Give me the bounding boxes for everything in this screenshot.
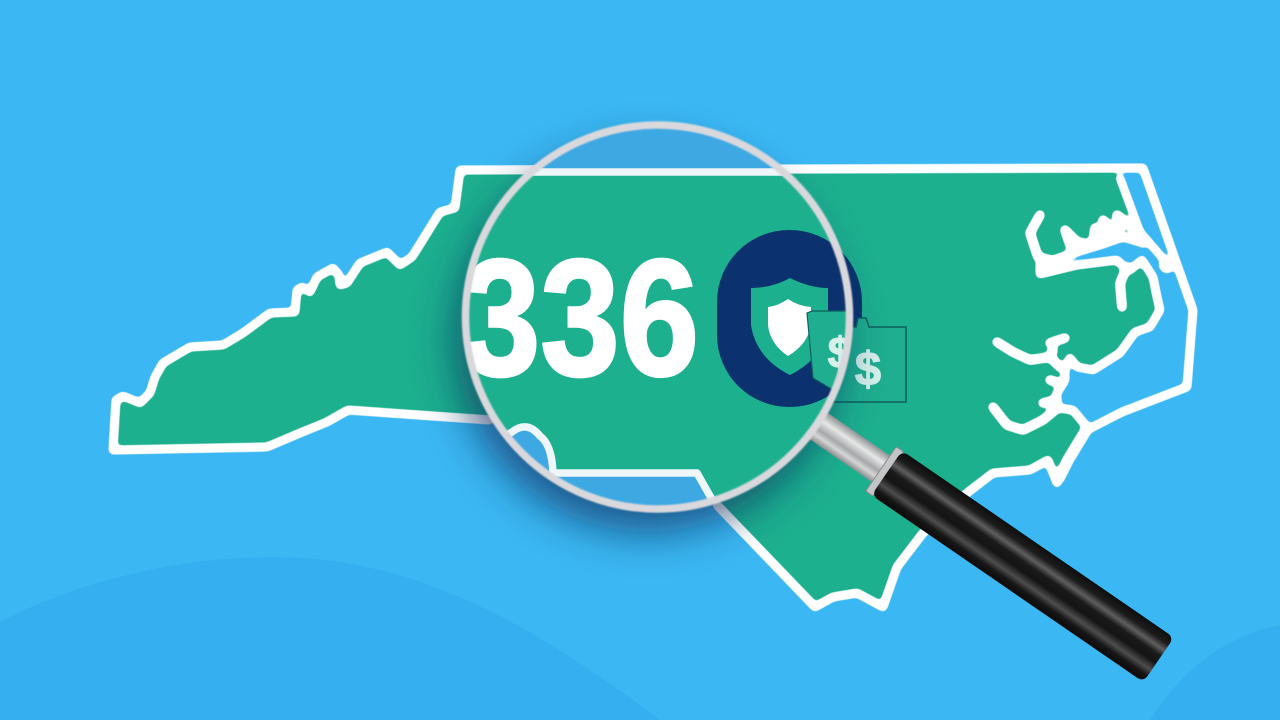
state outline and creeks — [113, 168, 1193, 607]
logo tail outside lens — [717, 230, 862, 407]
background wave: right — [1150, 625, 1280, 720]
lens map — [468, 168, 832, 500]
card: dollar bill outside lens: $ — [855, 342, 881, 395]
icon: navy rounded badge — [717, 230, 846, 407]
map: North Carolina state — [113, 168, 1193, 607]
magnifying glass ring — [466, 125, 850, 509]
icon: shield inner — [768, 299, 811, 356]
black grip — [871, 451, 1174, 682]
state fill — [113, 170, 1160, 607]
icon: shield — [751, 278, 828, 375]
metal neck — [806, 410, 897, 487]
lens shadow — [456, 148, 840, 532]
icon: dollar card in lens — [806, 310, 847, 390]
magnifying glass handle — [800, 401, 1174, 682]
collar — [866, 447, 904, 496]
background wave: left — [0, 557, 660, 720]
lens area code number: 336 — [461, 226, 699, 411]
magnified lens content — [468, 130, 847, 506]
card: dollar bill outside lens — [830, 318, 906, 402]
icon: dollar card in lens: $ — [828, 329, 852, 378]
